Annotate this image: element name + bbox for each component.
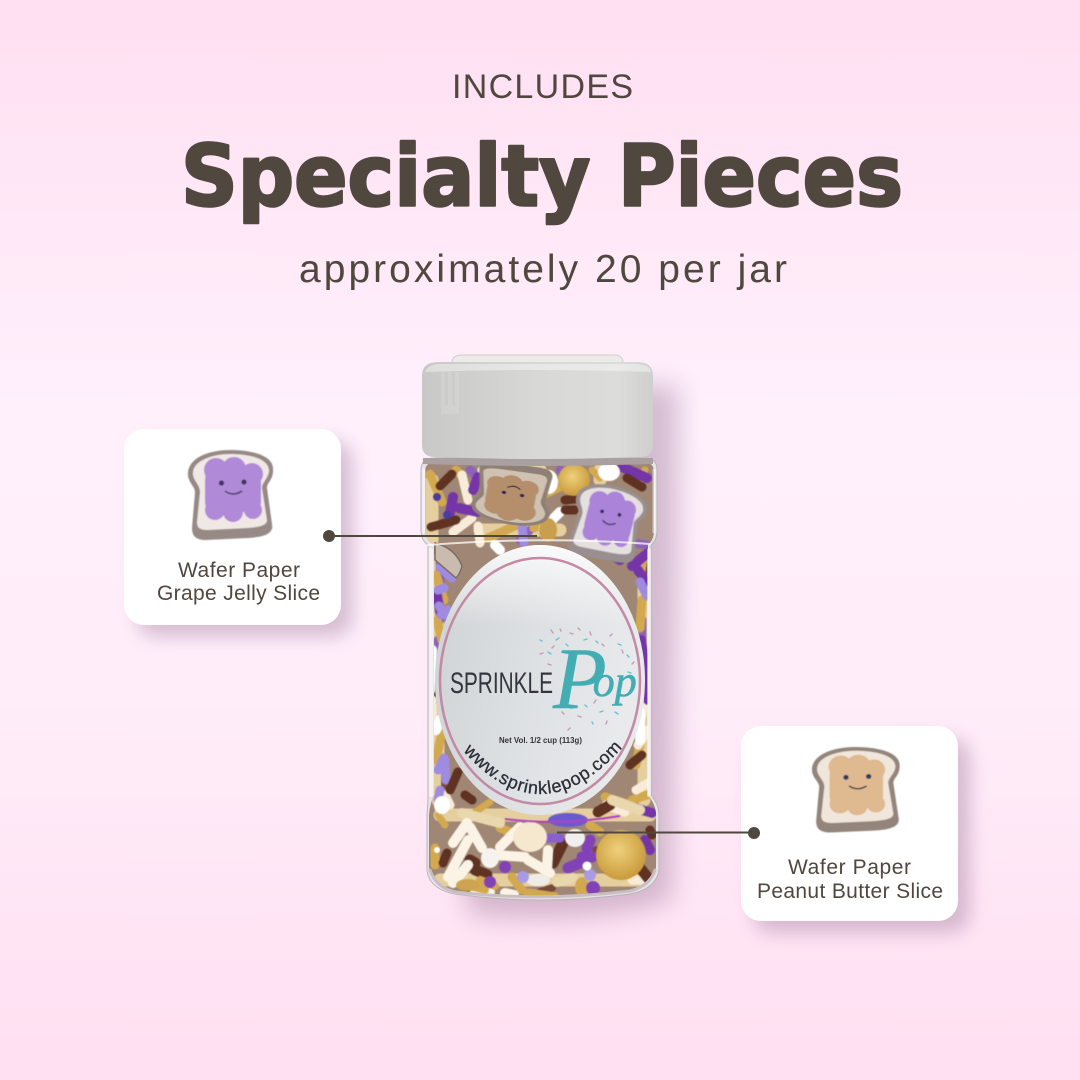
card label: Grape Jelly Slice xyxy=(157,582,320,605)
lid ridges xyxy=(441,372,459,414)
logo: sprinkle: SPRINKLE xyxy=(450,667,553,700)
website arc xyxy=(464,748,622,794)
confetti dashes xyxy=(540,628,634,730)
heading: specialty pieces: Specialty Pieces xyxy=(181,128,903,226)
card label: Peanut Butter Slice xyxy=(757,880,943,903)
callout card: grape jelly xyxy=(124,429,353,637)
card label xyxy=(157,559,320,605)
label oval xyxy=(435,545,645,815)
website url: www.sprinklepop.com xyxy=(464,742,622,794)
label top light xyxy=(435,545,645,815)
lid top highlight xyxy=(425,364,651,372)
sprinkle jar xyxy=(420,354,660,900)
pointer: peanut butter xyxy=(557,827,760,839)
card xyxy=(124,429,341,625)
card shadow xyxy=(753,738,970,933)
card label xyxy=(757,856,943,903)
glass highlights xyxy=(424,470,655,897)
filler layer xyxy=(432,470,650,880)
icon: grape jelly toast xyxy=(188,450,273,540)
card label: Wafer Paper xyxy=(178,559,300,582)
heading: includes: INCLUDES xyxy=(452,68,633,106)
wafer peanut butter slice in jar xyxy=(471,466,554,526)
partial wafer slice beside label xyxy=(435,543,462,578)
card shadow xyxy=(136,441,353,637)
wafer grape jelly slice in jar xyxy=(568,484,647,564)
jar lid xyxy=(422,362,653,459)
callout card: peanut butter xyxy=(741,726,970,933)
logo: pop: op xyxy=(593,657,637,706)
neck rim xyxy=(423,458,653,466)
jar shadow xyxy=(448,385,678,918)
subheading: approximately 20 per jar: approximately 20 per jar xyxy=(299,248,787,291)
sprinkles inside jar xyxy=(420,457,660,903)
jar glass body xyxy=(421,458,659,900)
pointer: grape jelly xyxy=(323,530,537,542)
jar lid top knob xyxy=(452,355,623,363)
icon: peanut butter toast xyxy=(812,747,900,832)
label pink ring xyxy=(440,558,640,804)
product label xyxy=(435,545,645,815)
candy balls and beans xyxy=(433,463,646,897)
logo: pop: P xyxy=(552,631,607,728)
net volume: Net Vol. 1/2 cup (113g) xyxy=(499,736,582,745)
card xyxy=(741,726,958,921)
bottom cluster xyxy=(462,800,640,882)
card label: Wafer Paper xyxy=(788,856,911,879)
